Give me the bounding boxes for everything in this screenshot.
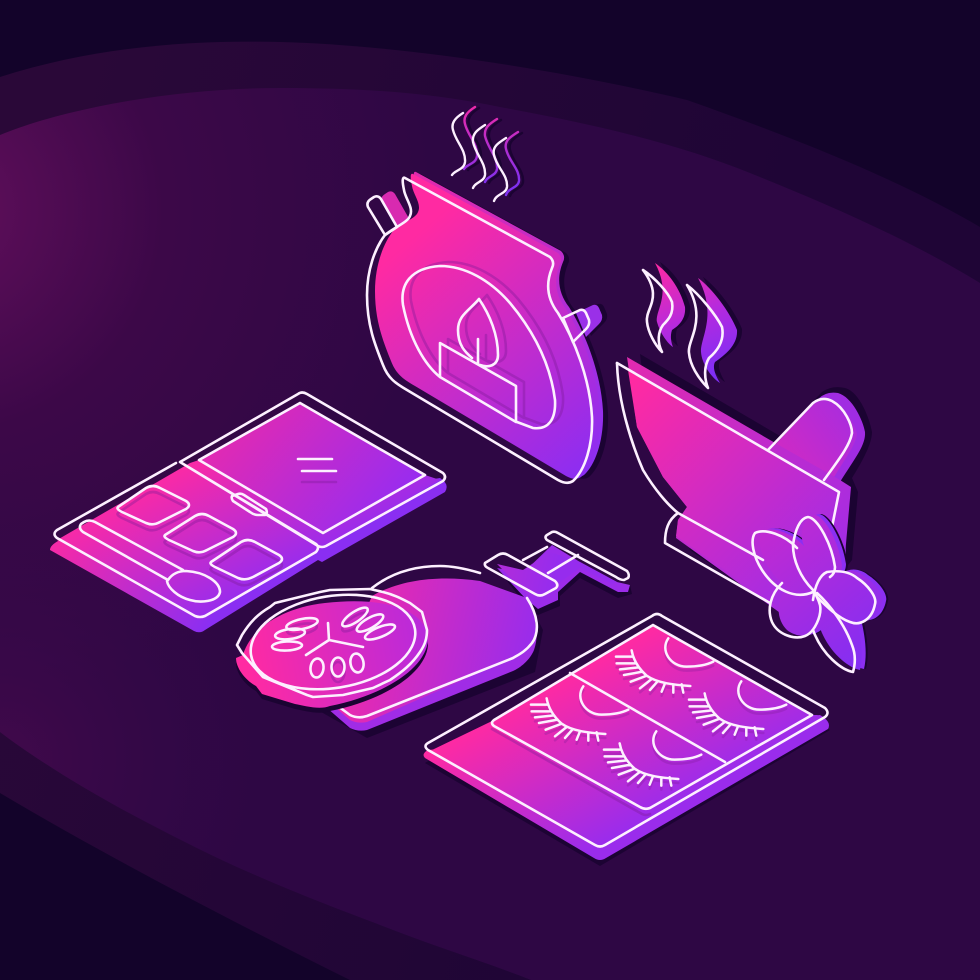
lashes — [531, 638, 786, 786]
icon: flower — [753, 514, 888, 672]
icon: pump bottle — [300, 532, 632, 738]
tray insert outline — [492, 625, 812, 809]
icon: mortar and pestle — [617, 354, 872, 625]
icon: cucumber slice — [236, 584, 428, 713]
icon: eyeshadow palette — [50, 392, 447, 632]
slice shadows — [286, 609, 370, 682]
palette lid detail shadows — [118, 482, 336, 585]
lamp window with candle — [402, 262, 563, 428]
eyeshadow pans — [118, 486, 189, 524]
pump fill — [497, 545, 632, 615]
seeds — [272, 604, 397, 678]
rind outline — [237, 589, 427, 697]
lash pair shadows — [531, 642, 786, 790]
icon: false eyelashes tray — [424, 614, 830, 866]
icon: aroma lamp — [367, 172, 608, 483]
applicator brush — [80, 520, 220, 601]
palette outline — [54, 392, 445, 617]
icon: aroma lamp steam — [452, 107, 523, 201]
icon: mortar steam wisps — [643, 262, 742, 388]
tray outer outline — [426, 614, 828, 846]
pestle — [775, 393, 865, 482]
clasp — [232, 494, 267, 515]
